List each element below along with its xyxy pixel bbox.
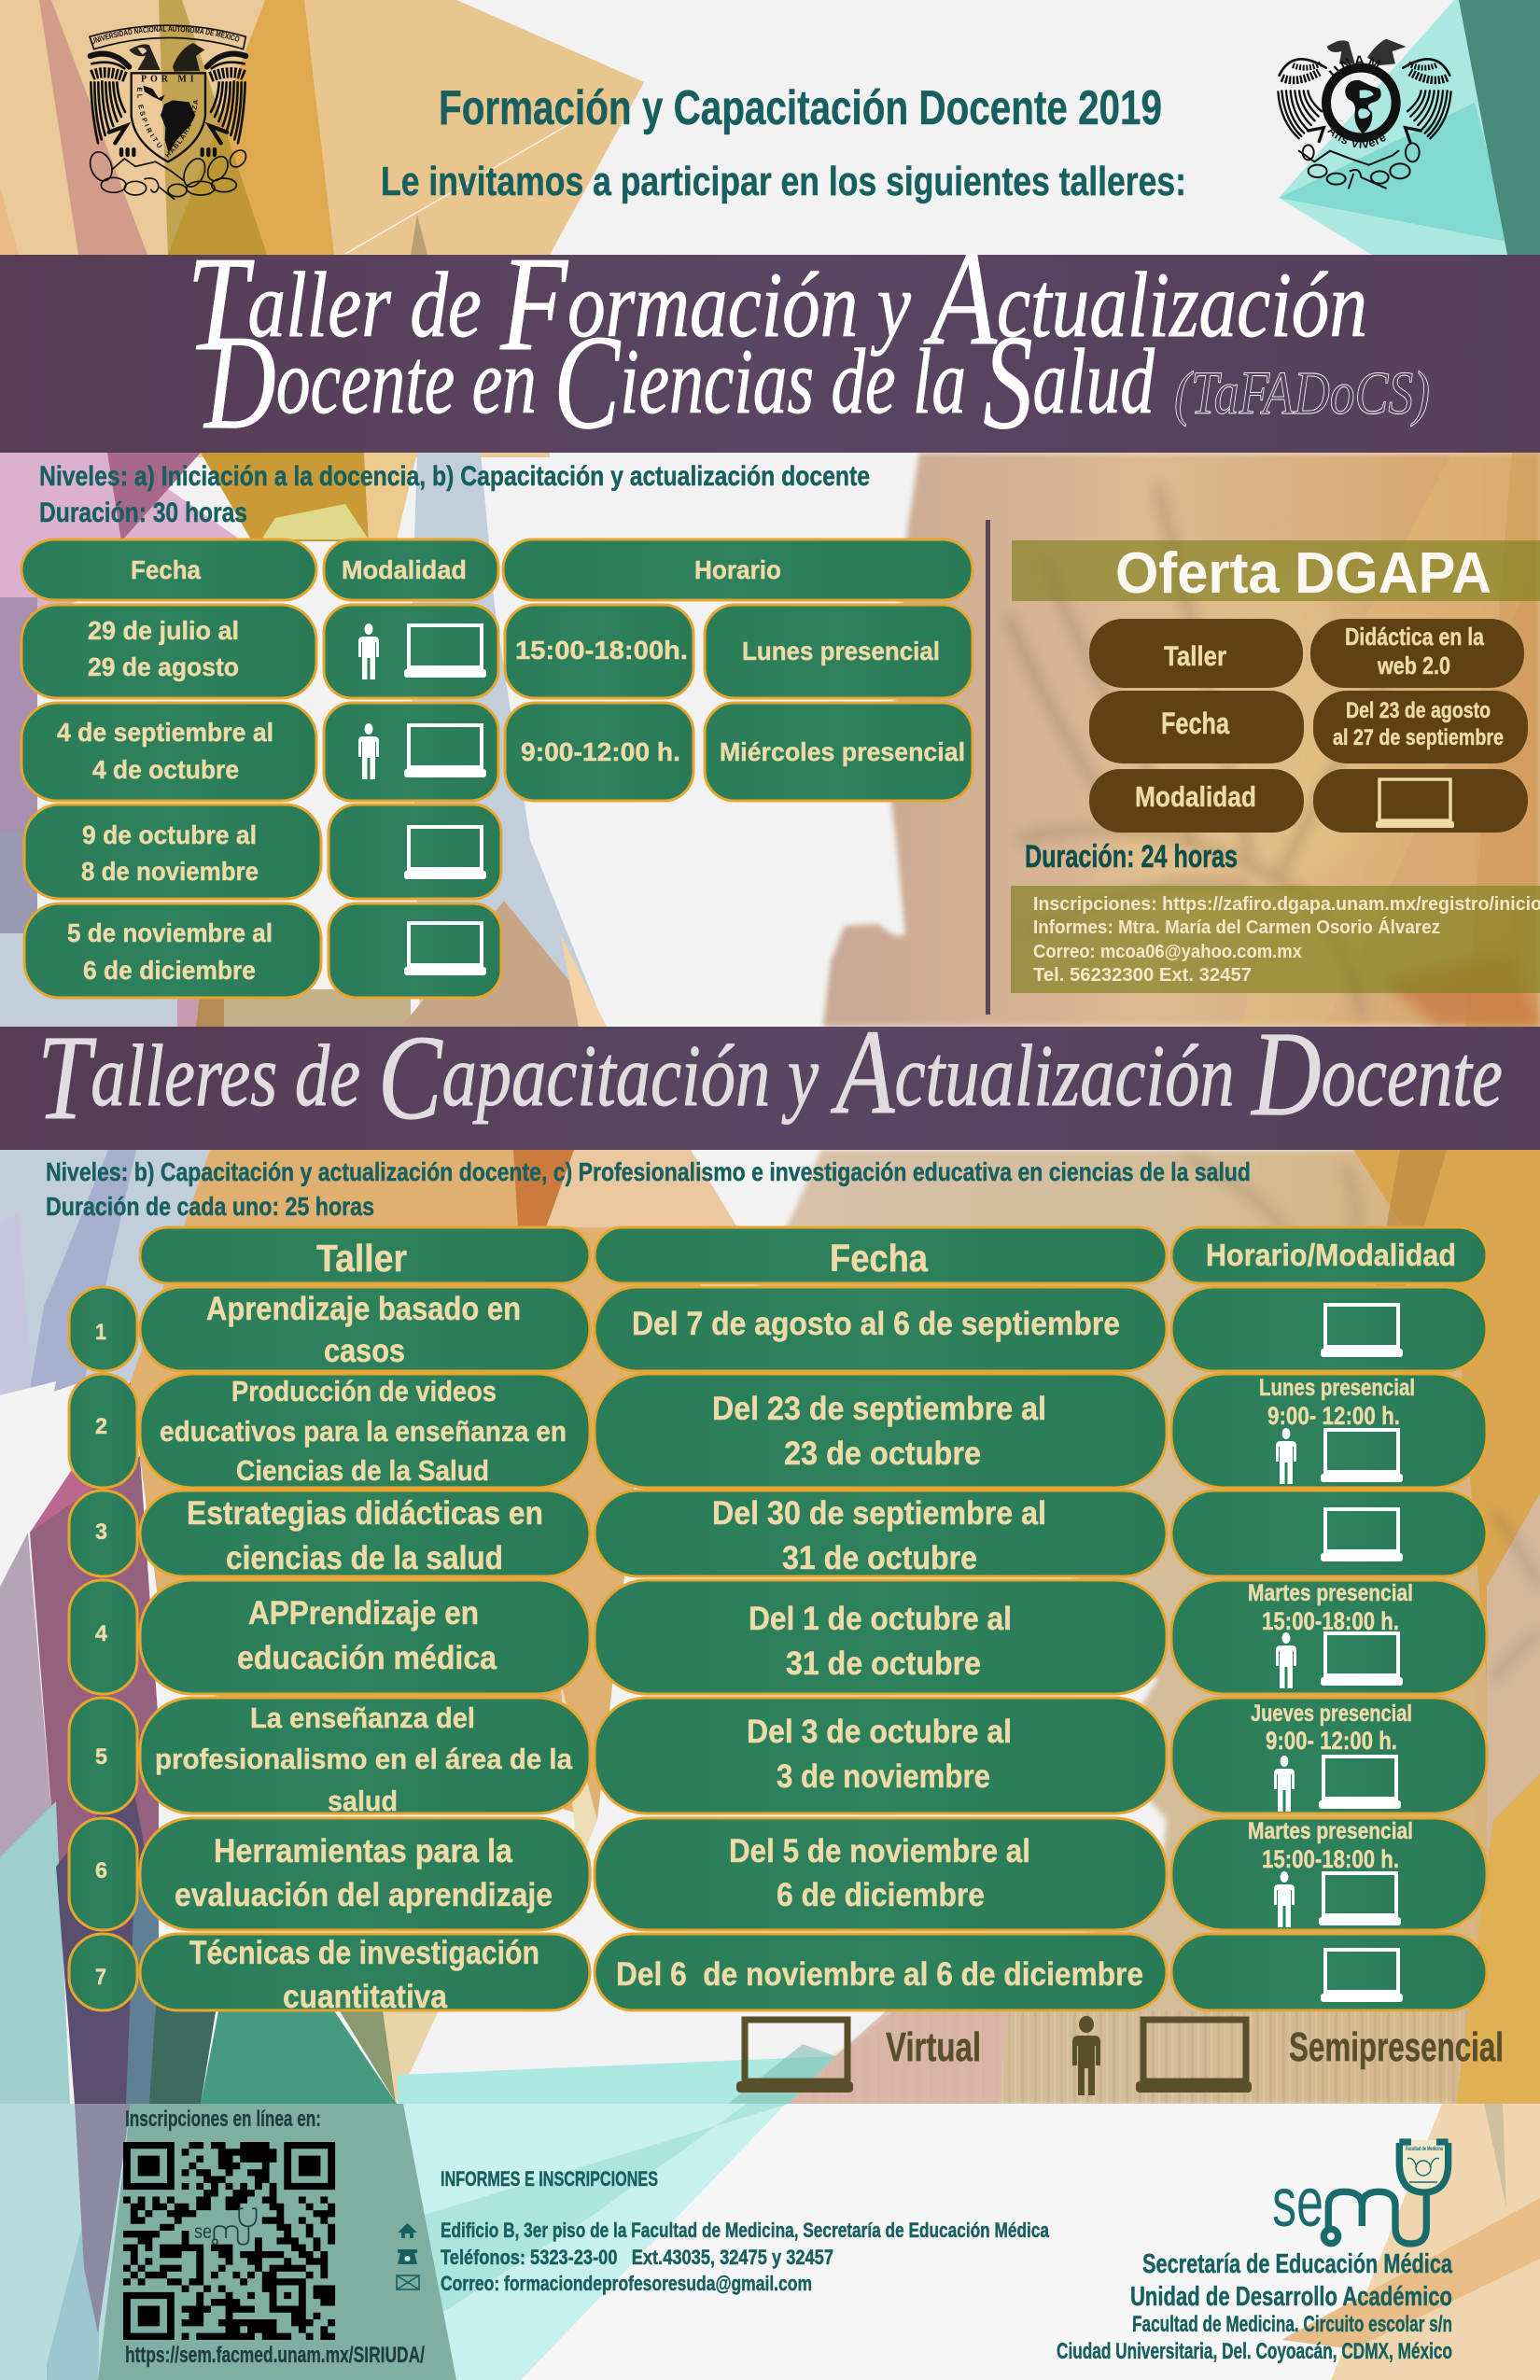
footer right: SEM logo and address: [1057, 2140, 1453, 2364]
row 1 date: Del 7 de agosto al 6 de septiembre: [632, 1306, 1120, 1342]
row 5 date: Del 3 de octubre al: [747, 1714, 1012, 1750]
row 1 workshop: Aprendizaje basado en: [206, 1291, 521, 1327]
SEM logo: se: [1272, 2163, 1323, 2241]
banner title: ctualización: [894, 1028, 1252, 1125]
row 2 date: [595, 1374, 1167, 1488]
registration heading: Inscripciones en línea en:: [125, 2107, 321, 2132]
header: Horario: Horario: [694, 555, 781, 584]
duration: Duración: 24 horas: [1025, 839, 1238, 875]
workshop table: [69, 1227, 1487, 2015]
header: Horario: [503, 539, 973, 600]
row 4 date: 6 de diciembre: [83, 956, 256, 985]
row 5 modality: 9:00- 12:00 h.: [1266, 1727, 1397, 1755]
row 7 workshop: [140, 1934, 590, 2015]
header: Horario/Modalidad: Horario/Modalidad: [1206, 1238, 1456, 1272]
row 6 date: Del 5 de noviembre al: [729, 1833, 1030, 1869]
row 3 modality: [329, 805, 501, 899]
header: Modalidad: Modalidad: [342, 555, 467, 584]
contact box: Correo: mcoa06@yahoo.com.mx: [1033, 942, 1302, 962]
row 2 date: Del 23 de septiembre al: [712, 1391, 1046, 1427]
row 6 number: 6: [95, 1858, 107, 1883]
row 5 modality: Jueves presencial: [1251, 1701, 1412, 1727]
row 5 workshop: La enseñanza del: [250, 1701, 475, 1734]
legend: person icon: [1072, 2016, 1100, 2095]
icon: mail: [397, 2275, 419, 2289]
vertical divider: [986, 520, 990, 1015]
row 4 number: [69, 1580, 137, 1694]
row 6 modality: [1171, 1818, 1487, 1930]
header: Fecha: [21, 539, 316, 600]
header titles: [381, 81, 1186, 204]
seal motto: POR MI: [141, 74, 194, 84]
row 4 date: 5 de noviembre al: [67, 918, 273, 947]
row 7 number: 7: [95, 1965, 106, 1990]
row 2 workshop: [140, 1374, 590, 1488]
row 6 modality: 15:00-18:00 h.: [1262, 1845, 1399, 1873]
legend: virtual laptop icon: [736, 2020, 853, 2093]
header: Fecha: [595, 1227, 1167, 1283]
label: Modalidad: Modalidad: [1135, 780, 1256, 813]
banner title: T: [37, 1011, 96, 1145]
contact box: [1011, 886, 1540, 993]
row 6 workshop: Herramientas para la: [214, 1833, 512, 1869]
duration text: Duración de cada uno: 25 horas: [46, 1192, 374, 1221]
row 1 time: [505, 605, 693, 698]
row 4 date: [595, 1580, 1167, 1694]
row 2 time: [505, 703, 693, 801]
row 1 date: 29 de julio al: [88, 616, 239, 645]
row 3 number: 3: [95, 1519, 107, 1545]
seal eagle highlight: [137, 48, 147, 54]
row 2 day: [705, 703, 973, 801]
row 7 workshop: cuantitativa: [283, 1979, 447, 2015]
row 1 date: [595, 1287, 1167, 1371]
QR code: [123, 2142, 335, 2340]
contact box: Informes: Mtra. María del Carmen Osorio Álvarez: [1033, 917, 1440, 938]
row 2 date: 4 de octubre: [92, 755, 239, 784]
row 6 workshop: evaluación del aprendizaje: [175, 1877, 553, 1913]
medicine seal UNAM lettering: UNAM: [1329, 56, 1381, 76]
banner title line 2: alud: [1033, 329, 1155, 433]
contact heading: INFORMES E INSCRIPCIONES: [441, 2167, 658, 2191]
icon: phone: [398, 2249, 417, 2264]
row 2 day: Miércoles presencial: [720, 737, 965, 766]
medicine seal serpent highlights: [1358, 90, 1374, 119]
phone numbers: Teléfonos: 5323-23-00 Ext.43035, 32475 y 32457: [441, 2246, 833, 2269]
row 2 date: [21, 703, 316, 801]
row 6 workshop: [140, 1818, 590, 1930]
banner title: A: [830, 1005, 895, 1140]
banner title line 1: ctualización: [997, 253, 1367, 357]
row 4 modality: Martes presencial: [1248, 1580, 1413, 1606]
row 7 date: [595, 1934, 1167, 2010]
row 2 date: 4 de septiembre al: [57, 718, 273, 747]
label: Modalidad: [1089, 769, 1304, 833]
contact box: Tel. 56232300 Ext. 32457: [1033, 965, 1252, 986]
row 3 date: 9 de octubre al: [82, 820, 257, 849]
banner title line 1: F: [499, 230, 568, 379]
value: dates: al 27 de septiembre: [1333, 725, 1504, 750]
QR centre logo: se: [194, 2221, 212, 2243]
row 2 workshop: Ciencias de la Salud: [236, 1454, 489, 1487]
header: Taller: Taller: [316, 1237, 407, 1280]
medicine seal ring: [1326, 68, 1396, 137]
seal right wing: [203, 54, 245, 155]
label: Fecha: Fecha: [1161, 707, 1229, 740]
header: Modalidad: [324, 539, 498, 600]
row 2 workshop: educativos para la enseñanza en: [160, 1415, 567, 1448]
seal cactus and mountains: [87, 147, 249, 199]
banner title: C: [378, 1011, 443, 1145]
invitation subtitle: Le invitamos a participar en los siguientes talleres:: [381, 159, 1186, 204]
value: dates: [1313, 691, 1528, 763]
row 2 modality: [1171, 1374, 1487, 1488]
banner title line 2: C: [553, 308, 622, 457]
row 3 workshop: Estrategias didácticas en: [187, 1495, 543, 1532]
label: Fecha: [1089, 691, 1304, 763]
row 1 number: 1: [95, 1320, 106, 1345]
banner title: D: [1251, 1007, 1322, 1141]
row 4 date: [24, 903, 321, 998]
banner title line 2: D: [203, 308, 276, 457]
row 4 workshop: [140, 1580, 590, 1694]
row 5 date: [595, 1698, 1167, 1813]
footer left: online registration: [123, 2107, 425, 2368]
banner title line 2: iencias de la: [620, 329, 983, 433]
row 1 date: 29 de agosto: [88, 652, 239, 681]
row 2 modality: Lunes presencial: [1259, 1375, 1415, 1401]
header: Fecha: Fecha: [131, 555, 201, 584]
value: workshop name: web 2.0: [1377, 651, 1450, 679]
row 5 date: 3 de noviembre: [777, 1758, 990, 1795]
levels and duration, section 1: [39, 461, 870, 528]
medicine seal right wing: [1403, 59, 1451, 142]
row 1 day: Lunes presencial: [742, 637, 940, 665]
row 5 workshop: salud: [328, 1785, 398, 1817]
medicine seal condor: [1367, 39, 1407, 65]
SEM logo: Facultad de Medicina: [1406, 2147, 1443, 2152]
row 4 date: 31 de octubre: [786, 1645, 981, 1682]
row 2 modality: 9:00- 12:00 h.: [1267, 1402, 1400, 1430]
icon: home: [398, 2223, 417, 2238]
medicine seal Alis Vivere lettering: Alis Vivere: [1327, 129, 1386, 148]
row 5 number: 5: [95, 1744, 107, 1770]
seal map of Latin America: [143, 86, 195, 153]
row 1 modality: [1171, 1287, 1487, 1371]
value: virtual laptop: [1313, 769, 1528, 833]
QR centre logo: [194, 2208, 257, 2245]
row 3 date: Del 30 de septiembre al: [712, 1495, 1046, 1532]
banner title: alleres de: [91, 1028, 378, 1125]
row 3 date: 31 de octubre: [782, 1540, 977, 1576]
QR URL: https://sem.facmed.unam.mx/SIRIUDA/: [125, 2343, 425, 2368]
row 3 workshop: ciencias de la salud: [226, 1540, 503, 1576]
row 1 workshop: casos: [324, 1333, 405, 1369]
address: Edificio B, 3er piso de la Facultad de Medicina, Secretaría de Educación Médica: [441, 2219, 1050, 2242]
row 4 workshop: APPrendizaje en: [248, 1595, 479, 1631]
row 4 modality: [1171, 1580, 1487, 1694]
purple banner: TaFADoCS: [0, 224, 1540, 457]
value: dates: Del 23 de agosto: [1346, 698, 1491, 723]
row 6 number: [69, 1818, 137, 1930]
row 1 time: 15:00-18:00h.: [515, 636, 688, 665]
row 7 workshop: Técnicas de investigación: [189, 1935, 539, 1971]
row 1 number: [69, 1287, 137, 1371]
row 7 number: [69, 1934, 137, 2010]
row 5 workshop: profesionalismo en el área de la: [155, 1743, 573, 1775]
row 3 number: [69, 1491, 137, 1576]
row 4 workshop: educación médica: [237, 1640, 497, 1676]
row 1 modality: [324, 605, 498, 698]
header: Horario/Modalidad: [1171, 1227, 1487, 1283]
banner acronym: (TaFADoCS): [1174, 359, 1430, 427]
row 4 number: 4: [95, 1621, 108, 1646]
label: Taller: [1089, 619, 1303, 688]
header: Fecha: Fecha: [830, 1237, 929, 1280]
row 2 time: 9:00-12:00 h.: [521, 737, 680, 766]
value: workshop name: Didáctica en la: [1345, 623, 1484, 651]
purple banner: Talleres: [0, 1005, 1540, 1150]
seal motto left: EL ESPIRITU: [137, 88, 162, 147]
levels text: Niveles: a) Iniciación a la docencia, b) Capacitación y actualización docente: [39, 461, 870, 492]
legend: semi-presential laptop icon: [1136, 2020, 1252, 2093]
value: workshop name: [1310, 619, 1524, 688]
banner title line 1: T: [187, 230, 255, 379]
row 6 date: 6 de diciembre: [777, 1877, 985, 1913]
row 4 modality: [329, 903, 501, 998]
banner title line 1: aller de: [248, 253, 500, 357]
row 7 modality: [1171, 1934, 1487, 2010]
duration text: Duración: 30 horas: [39, 497, 247, 528]
legend: Virtual: Virtual: [886, 2024, 981, 2070]
row 1 workshop: [140, 1287, 590, 1371]
panel: Oferta DGAPA: [1011, 540, 1540, 993]
row 3 date: [595, 1491, 1167, 1576]
row 5 number: [69, 1698, 137, 1813]
seal shield: [132, 73, 205, 161]
seal banner: [90, 25, 245, 49]
row 1 date: [21, 605, 316, 698]
medicine seal serpent and staff: [1345, 80, 1381, 133]
row 3 date: [24, 805, 321, 899]
row 7 date: Del 6 de noviembre al 6 de diciembre: [616, 1956, 1143, 1993]
banner title line 1: ormación y: [567, 253, 930, 357]
levels text: Niveles: b) Capacitación y actualización docente, c) Profesionalismo e investigación educativa en ciencias de la salud: [46, 1157, 1251, 1186]
row 2 number: [69, 1374, 137, 1488]
row 2 date: 23 de octubre: [784, 1435, 981, 1472]
row 5 workshop: [140, 1698, 590, 1817]
row 3 date: 8 de noviembre: [81, 857, 259, 886]
email: Correo: formaciondeprofesoresuda@gmail.com: [441, 2272, 812, 2295]
banner title line 1: A: [924, 224, 998, 373]
legend: [736, 2016, 1504, 2095]
banner title: apacitación y: [442, 1028, 836, 1125]
logo: UNAM seal: [88, 24, 248, 200]
schedule table, section 1: [21, 539, 973, 998]
contact box: Inscripciones: https://zafiro.dgapa.unam.mx/registro/inicio: [1033, 894, 1540, 915]
levels and duration, section 2: [46, 1157, 1251, 1221]
medicine seal eagle: [1327, 40, 1355, 63]
row 6 date: [595, 1818, 1167, 1930]
banner title line 2: ocente en: [276, 329, 553, 433]
row 2 number: 2: [95, 1414, 107, 1439]
seal university name: UNIVERSIDAD NACIONAL AUTONOMA DE MEXICO: [91, 26, 239, 44]
row 3 workshop: [140, 1491, 590, 1576]
footer centre: contact information: [397, 2167, 1050, 2295]
header: Taller: [140, 1227, 590, 1283]
medicine seal left wing: [1278, 59, 1326, 142]
row 6 modality: Martes presencial: [1248, 1818, 1413, 1844]
label: Taller: Taller: [1164, 641, 1226, 672]
row 4 modality: 15:00-18:00 h.: [1262, 1607, 1399, 1635]
row 2 workshop: Producción de videos: [231, 1375, 497, 1407]
seal left wing: [91, 54, 133, 155]
SEM logo: [1272, 2140, 1449, 2244]
row 4 date: Del 1 de octubre al: [749, 1601, 1012, 1637]
seal condor: [173, 43, 204, 72]
row 1 day: [705, 605, 973, 698]
main title: Formación y Capacitación Docente 2019: [439, 81, 1162, 135]
seal eagle: [129, 44, 161, 70]
logo: Facultad de Medicina seal: [1277, 39, 1452, 189]
row 2 modality: [324, 703, 498, 801]
banner title line 2: S: [983, 308, 1033, 457]
medicine seal cactus and mountains: [1299, 143, 1420, 189]
seal motto right: HABLARA RAZA: [164, 100, 198, 158]
row 3 modality: [1171, 1491, 1487, 1576]
row 5 modality: [1171, 1698, 1487, 1813]
Oferta heading band: Oferta DGAPA: [1115, 541, 1491, 606]
